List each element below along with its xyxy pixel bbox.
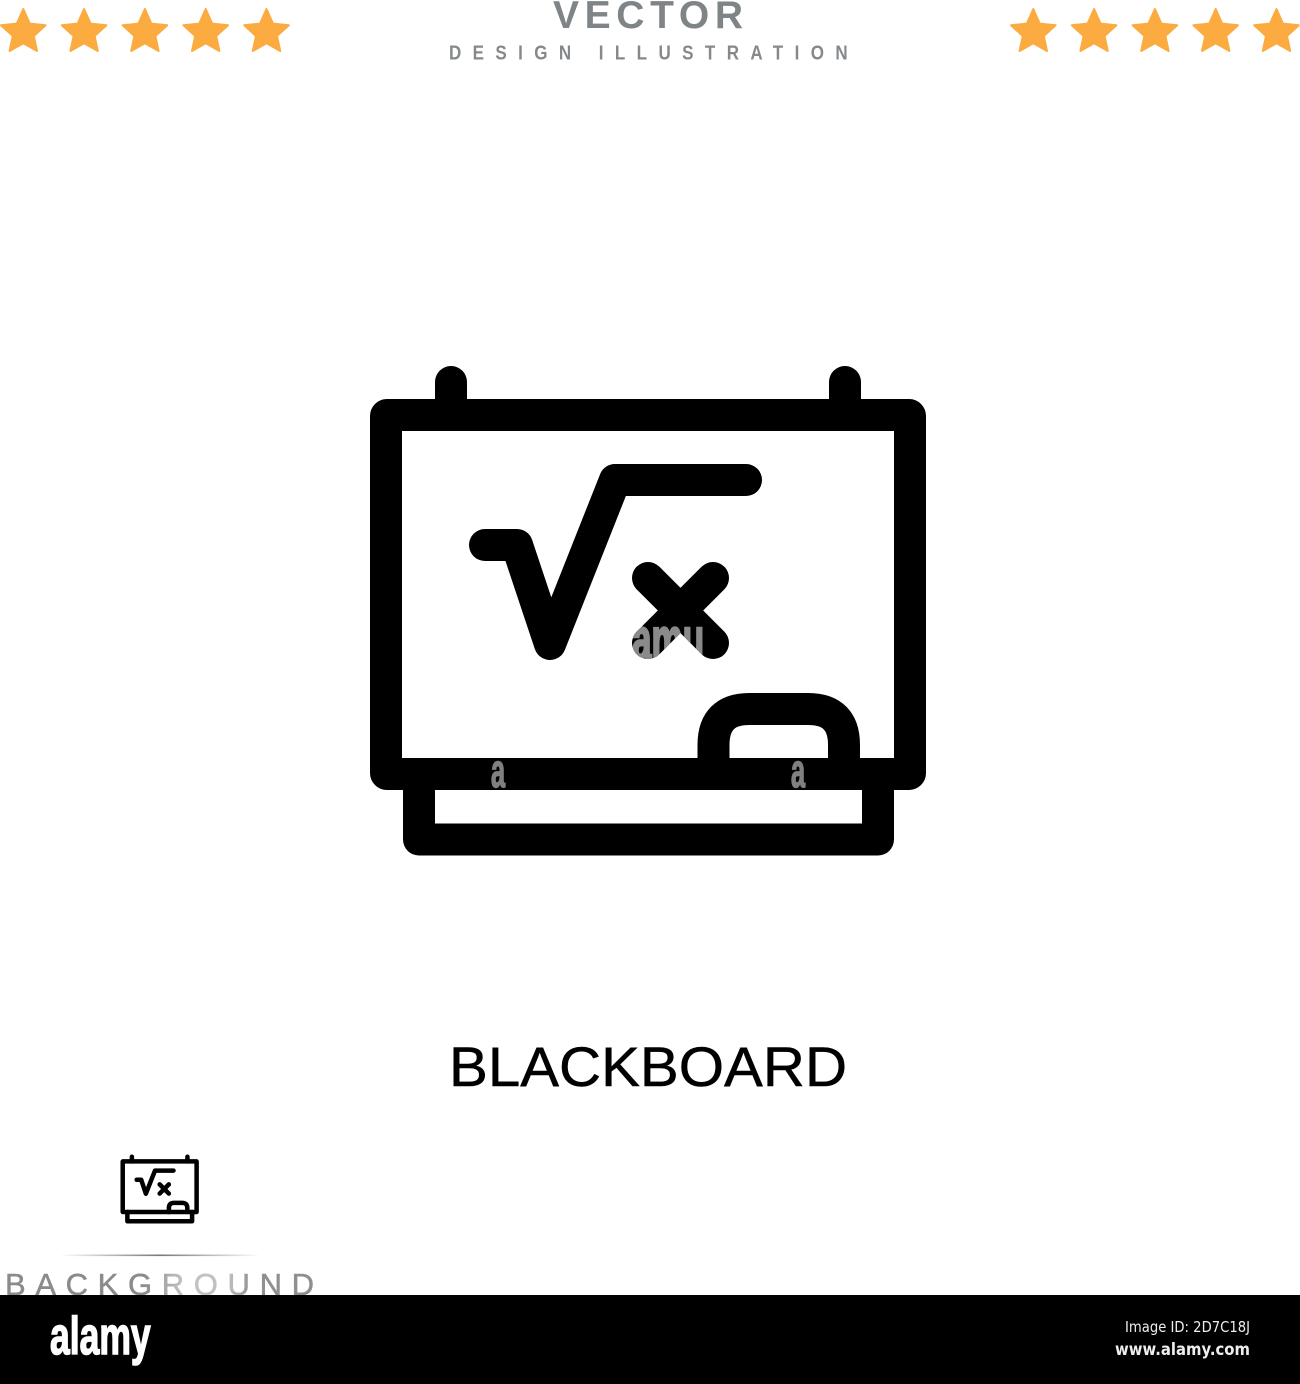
watermark text across the x: amu <box>632 608 704 673</box>
title: BLACKBOARD: BLACKBOARD <box>449 1035 847 1098</box>
watermark letter on board ledge, left: a <box>491 746 506 798</box>
label: BACKGROUND: BACKGROUND <box>5 1267 314 1302</box>
left star rating <box>1 9 289 51</box>
square root sign <box>485 480 746 644</box>
black footer bar <box>0 1295 1300 1384</box>
right star rating <box>1011 9 1299 51</box>
chalk tray <box>419 774 878 840</box>
eraser <box>714 709 844 774</box>
small blackboard icon <box>123 1157 197 1221</box>
board frame <box>386 415 910 774</box>
alamy logo: alamy <box>50 1306 151 1366</box>
thin divider rule <box>60 1254 260 1256</box>
image id: Image ID: 2D7C18J <box>1125 1318 1250 1336</box>
website: www.alamy.com <box>1115 1340 1250 1360</box>
subheading: DESIGN ILLUSTRATION: DESIGN ILLUSTRATION <box>449 41 848 64</box>
hanging hooks <box>451 382 845 415</box>
watermark letter on board ledge, right: a <box>791 746 806 798</box>
letter x <box>648 578 713 643</box>
icon: blackboard with square root of x <box>386 382 910 840</box>
